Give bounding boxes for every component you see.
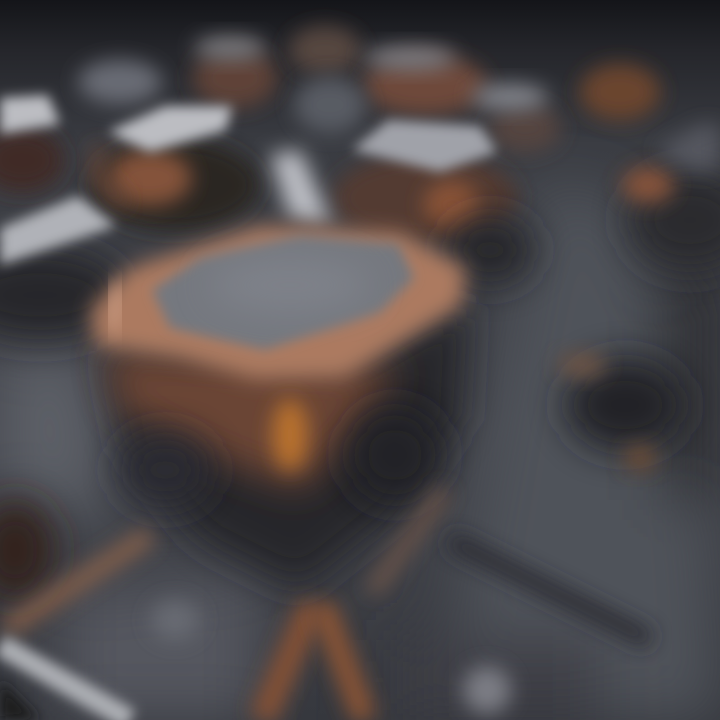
glowing orange seam bbox=[272, 399, 308, 471]
grey top face bbox=[152, 236, 414, 350]
cube body bbox=[105, 300, 468, 590]
copper rim bbox=[90, 226, 466, 380]
lower right details bbox=[151, 540, 705, 720]
cube right bbox=[622, 125, 720, 270]
cube upper centre bbox=[333, 120, 534, 284]
lower left cube and strut bbox=[0, 500, 150, 720]
dark lower body bbox=[119, 434, 211, 506]
cube upper left bbox=[90, 106, 260, 231]
dark cube mid right bbox=[558, 353, 685, 471]
cube far left bbox=[0, 95, 125, 340]
distant row of cubes bbox=[78, 26, 660, 152]
main cube bbox=[90, 226, 468, 590]
background surface bbox=[0, 180, 720, 720]
copper highlight bbox=[112, 285, 118, 330]
bright gap between cubes bbox=[270, 150, 332, 225]
copper struts at bottom bbox=[262, 490, 445, 720]
